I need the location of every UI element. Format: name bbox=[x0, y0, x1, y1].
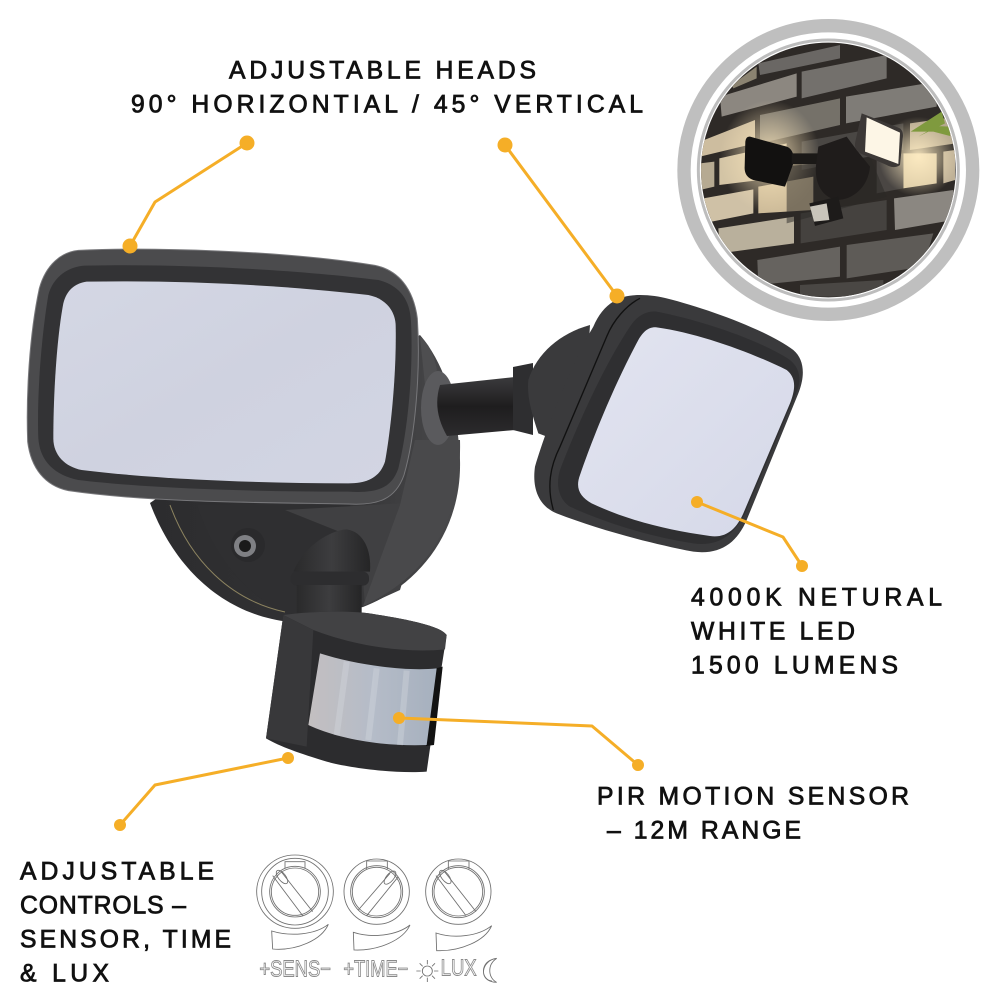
text: LED: WHITE LED bbox=[691, 618, 855, 646]
rear dome bbox=[528, 325, 590, 447]
socket bbox=[231, 528, 265, 562]
lens bbox=[578, 327, 794, 536]
PIR motion sensor bbox=[266, 612, 447, 772]
miniature fixture bbox=[745, 113, 903, 226]
dial: lux bbox=[416, 859, 497, 982]
inset photo bbox=[684, 26, 973, 314]
heading: adjustable heads: 90° HORIZONTIAL / 45° VERTICAL bbox=[131, 92, 643, 118]
callout lines and dots bbox=[114, 136, 808, 831]
dial: lux: LUX bbox=[441, 955, 477, 981]
sensor assembly bbox=[266, 529, 447, 772]
lens bbox=[53, 281, 396, 483]
text: adjustable controls: ADJUSTABLE bbox=[20, 858, 214, 886]
icon: moon bbox=[483, 958, 497, 982]
bezel bbox=[38, 265, 412, 492]
text: PIR sensor: – 12M RANGE bbox=[607, 818, 801, 844]
callout: PIR sensor bbox=[393, 712, 644, 771]
text: adjustable controls: SENSOR, TIME bbox=[20, 926, 231, 954]
heading: adjustable heads: ADJUSTABLE HEADS bbox=[229, 58, 536, 84]
dial: time bbox=[343, 859, 410, 982]
callout: LED bbox=[691, 496, 808, 572]
plant leaf bbox=[911, 112, 950, 137]
dial: sensitivity: +SENS− bbox=[259, 956, 331, 982]
text: LED: 1500 LUMENS bbox=[691, 652, 898, 680]
left head bbox=[27, 249, 418, 504]
sensor neck bbox=[291, 529, 370, 617]
mounting base bbox=[150, 335, 460, 622]
dial: time: +TIME− bbox=[343, 956, 408, 982]
callout: right head bbox=[498, 138, 624, 304]
text: adjustable controls: & LUX bbox=[20, 960, 109, 988]
control dials bbox=[257, 855, 497, 982]
callout: left head bbox=[122, 136, 254, 254]
PIR lens bbox=[308, 653, 437, 745]
dial: sensitivity bbox=[257, 855, 333, 982]
callout: controls bbox=[114, 752, 294, 831]
text: LED: 4000K NETURAL bbox=[691, 584, 942, 612]
right head bbox=[528, 295, 803, 552]
bezel bbox=[558, 312, 799, 544]
swivel arm bbox=[420, 337, 533, 445]
text: adjustable controls: CONTROLS – bbox=[20, 892, 186, 920]
text: PIR sensor: PIR MOTION SENSOR bbox=[597, 784, 909, 810]
icon: sun bbox=[416, 960, 438, 982]
